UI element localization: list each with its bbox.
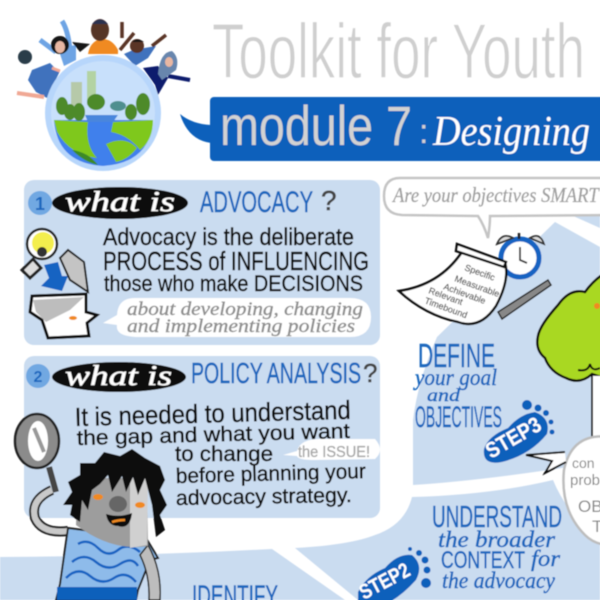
heading: understand the broader context: the advocacy bbox=[442, 568, 556, 593]
badge: number 2 bbox=[26, 364, 50, 388]
heading: define your goal and objectives: and bbox=[427, 385, 461, 405]
heading: what is: what is bbox=[65, 187, 175, 218]
icon: light bulb bbox=[22, 229, 57, 278]
text block: advocacy definition: Advocacy is the deliberate bbox=[103, 224, 354, 251]
figure: arm bbox=[34, 490, 68, 531]
figure: shirt and trousers bbox=[56, 528, 160, 600]
badge: number 1: 1 bbox=[35, 194, 45, 214]
figure: head bbox=[63, 449, 167, 548]
figure: person with headscarf bbox=[143, 51, 190, 95]
figure: person in orange bbox=[88, 19, 118, 54]
icon: pen bbox=[498, 280, 551, 319]
callout: about developing bbox=[103, 298, 371, 337]
icon: smart checklist scroll: Relevant bbox=[427, 285, 465, 307]
heading: understand the broader context: CONTEXT bbox=[441, 547, 525, 574]
figure: person with black hair bbox=[40, 21, 90, 66]
icon: smart checklist scroll: Specific bbox=[463, 262, 497, 283]
text block: advocacy definition: PROCESS of INFLUENCING bbox=[103, 246, 369, 276]
icon: smart checklist scroll bbox=[399, 244, 506, 324]
text block: advocacy definition bbox=[103, 224, 369, 296]
callout: about developing: about developing, changing bbox=[127, 299, 363, 320]
text block: policy analysis explanation: the gap and what you want bbox=[77, 420, 350, 450]
heading: advocacy: ADVOCACY bbox=[200, 186, 313, 219]
illustration: youth with magnifying glass bbox=[15, 414, 167, 600]
badge: number 2: 2 bbox=[34, 369, 43, 386]
heading: define your goal and objectives bbox=[413, 337, 502, 434]
callout: connect problem to objective: con bbox=[572, 455, 595, 471]
figure: person in blue with raised arms bbox=[120, 22, 166, 66]
text block: policy analysis explanation: to change bbox=[175, 443, 273, 466]
heading: what is: what is bbox=[65, 361, 172, 392]
figure: person in blue, left bbox=[17, 50, 60, 98]
text block: policy analysis explanation: It is needed to understand bbox=[74, 395, 351, 432]
heading: understand the broader context bbox=[432, 499, 562, 593]
icon: smart checklist scroll: Measurable bbox=[453, 273, 501, 299]
callout: the issue: the ISSUE! bbox=[298, 444, 370, 461]
heading: what is bbox=[52, 187, 188, 219]
speech bubble: are your objectives smart bbox=[384, 178, 600, 238]
badge: number 1 bbox=[28, 191, 52, 215]
icon: step 3 footprint: STEP3 bbox=[481, 412, 545, 463]
infographic canvas: OBJECTIVES bbox=[415, 401, 502, 434]
heading: policy analysis: POLICY ANALYSIS bbox=[191, 358, 361, 390]
callout: connect problem to objective: prob bbox=[570, 472, 600, 489]
illustration: youth group around globe bbox=[17, 19, 190, 171]
heading: understand the broader context: the broader bbox=[438, 527, 556, 552]
arrow: into open box bbox=[41, 262, 68, 291]
banner: module 7 bbox=[180, 94, 600, 161]
text block: advocacy definition: those who make DECISIONS bbox=[104, 271, 363, 296]
icon: magnifying glass bbox=[15, 414, 59, 492]
heading: advocacy: ? bbox=[321, 185, 337, 216]
banner: module 7: module 7 bbox=[220, 94, 412, 157]
icon: alarm clock bbox=[497, 233, 544, 277]
text block: policy analysis explanation bbox=[74, 395, 366, 510]
heading: what is bbox=[52, 361, 186, 392]
callout: about developing: and implementing policies bbox=[127, 316, 355, 337]
heading: define your goal and objectives: your goal bbox=[413, 365, 497, 390]
text block: policy analysis explanation: before planning your bbox=[176, 460, 366, 488]
icon: smart checklist scroll: Timebound bbox=[423, 295, 469, 320]
illustration: tree bbox=[537, 270, 600, 445]
arrow: tree to callout bbox=[526, 452, 566, 473]
panel: what is policy analysis bbox=[24, 356, 380, 518]
callout: the issue bbox=[283, 439, 380, 461]
heading: define your goal and objectives: DEFINE bbox=[418, 337, 495, 374]
banner: module 7: : bbox=[419, 113, 428, 151]
callout: connect problem to objective bbox=[563, 436, 600, 545]
icon: globe bbox=[45, 55, 161, 171]
text block: policy analysis explanation: advocacy strategy. bbox=[176, 484, 352, 510]
heading: policy analysis: ? bbox=[363, 358, 377, 388]
figure: hair bbox=[63, 449, 167, 537]
icon: smart checklist scroll: Achievable bbox=[442, 281, 487, 306]
heading: understand the broader context: for bbox=[531, 546, 561, 571]
panel: what is advocacy bbox=[22, 180, 380, 345]
icon: open box bbox=[30, 250, 97, 338]
